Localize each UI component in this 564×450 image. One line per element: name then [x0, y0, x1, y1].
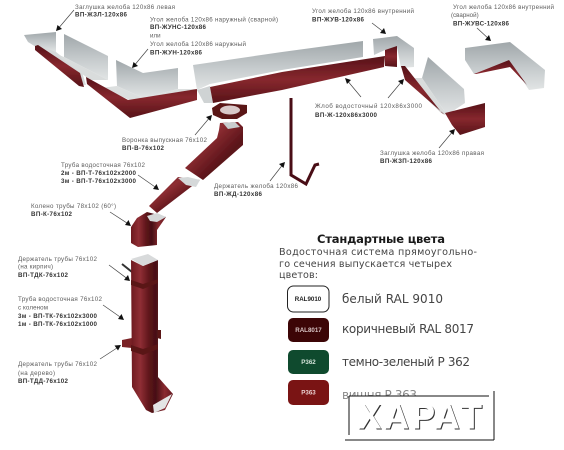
arrow: pipe — [138, 175, 159, 190]
watermark — [345, 391, 494, 440]
label: brick holder: Держатель трубы 76х102 — [18, 256, 98, 263]
arrow: funnel — [195, 115, 212, 135]
label: inner corner — [312, 8, 415, 24]
label: inner corner: ВП-ЖУВ-120х86 — [312, 16, 365, 24]
label: outer corner: Угол желоба 120х86 наружный — [150, 41, 247, 48]
arrow: wood holder — [100, 345, 121, 359]
arrow: right cap — [439, 129, 455, 148]
illustration: outlet funnel and pipes — [131, 103, 247, 247]
label: pipe: Труба водосточная 76х102 — [61, 162, 146, 169]
label: pipe with elbow — [18, 296, 103, 328]
rear tab — [157, 330, 161, 339]
label: elbow — [31, 203, 116, 218]
funnel outlet pipe — [185, 122, 243, 180]
illustration: downpipe with elbow and holders — [122, 254, 173, 413]
straight pipe — [149, 177, 200, 213]
label: pipe with elbow: Труба водосточная 76х102 — [18, 296, 103, 303]
swatch: white — [288, 286, 329, 312]
pipe body — [131, 260, 173, 413]
arrow: gutter right — [388, 79, 404, 98]
swatch: brown: RAL8017 — [295, 327, 322, 334]
pipe elbow — [131, 212, 166, 247]
clamps — [131, 279, 158, 355]
swatch: brown — [288, 318, 329, 342]
label: outer corner — [150, 16, 278, 56]
label: outer corner: ВП-ЖУН-120х86 — [150, 50, 203, 56]
label: welded inner corner: ВП-ЖУВС-120х86 — [453, 20, 510, 28]
long gutter section — [193, 41, 385, 103]
label: pipe: 3м - ВП-Т-76х102х3000 — [61, 178, 137, 185]
watermark: ХАРАТ — [358, 398, 482, 436]
illustration: gutter assembly — [24, 32, 545, 135]
bottom opening — [153, 394, 172, 413]
brick holder spike — [122, 264, 132, 272]
arrow: gutter left — [345, 78, 361, 97]
label: brick holder: ВП-ТДК-76х102 — [18, 272, 69, 279]
arrow: hook holder — [270, 162, 285, 181]
heading: Стандартные цвета — [317, 232, 445, 246]
label: pipe with elbow: с коленом — [18, 304, 48, 312]
colour label: brown: коричневый RAL 8017 — [342, 322, 474, 336]
label: welded inner corner: (сварной) — [451, 12, 479, 19]
label: wood holder — [18, 361, 98, 385]
colour label: green: темно-зеленый Р 362 — [342, 355, 470, 369]
label: pipe: 2м - ВП-Т-76х102х2000 — [61, 170, 137, 177]
funnel ring — [212, 103, 247, 119]
label: pipe with elbow: 1м - ВП-ТК-76х102х1000 — [18, 321, 98, 328]
label: funnel: ВП-В-76х102 — [122, 145, 165, 152]
label: outer corner: Угол желоба 120х86 наружный (сварной) — [150, 16, 278, 24]
swatch: white: RAL9010 — [295, 296, 322, 303]
arrow: pipe with elbow — [103, 305, 124, 320]
intro text — [279, 247, 477, 281]
arrow: outer corner — [132, 49, 148, 68]
label: brick holder — [18, 256, 98, 279]
arrows — [56, 10, 491, 359]
label: brick holder: (на кирпич) — [18, 264, 53, 270]
label: gutter — [315, 103, 423, 119]
label: gutter: Жлоб водосточный 120х86х3000 — [315, 103, 423, 110]
label: gutter: ВП-Ж-120х86х3000 — [315, 112, 378, 119]
label: left cap — [75, 4, 175, 18]
label: welded inner corner: Угол желоба 120х86 внутренний — [453, 4, 555, 11]
label: right cap: Заглушка желоба 120х86 правая — [380, 150, 484, 157]
watermark: ХАРАТ — [359, 398, 483, 438]
outer corner section — [86, 60, 197, 118]
label: funnel — [122, 137, 208, 152]
right gutter section with end cap — [401, 57, 485, 135]
arrow: left cap — [56, 10, 74, 31]
top opening — [131, 254, 158, 266]
panel: standard colours — [279, 232, 477, 405]
arrow: brick holder — [109, 265, 130, 281]
label: elbow: ВП-К-76х102 — [31, 211, 73, 218]
label: pipe — [61, 162, 146, 185]
label: wood holder: ВП-ТДД-76х102 — [18, 378, 69, 385]
label: wood holder: (на дерево) — [18, 370, 55, 377]
label: welded inner corner — [451, 4, 555, 28]
arrow: inner corner — [372, 23, 386, 34]
label: wood holder: Держатель трубы 76х102 — [18, 361, 98, 368]
intro text: го сечения выпускается четырех — [279, 259, 452, 270]
swatch: green: P362 — [301, 359, 316, 366]
label: funnel: Воронка выпускная 76х102 — [122, 137, 208, 144]
swatch: green — [288, 350, 329, 374]
label: right cap: ВП-ЖЗП-120х86 — [380, 158, 433, 165]
label: right cap — [380, 150, 484, 165]
label: hook holder — [214, 183, 299, 198]
label: left cap: ВП-ЖЗЛ-120х86 — [75, 12, 128, 18]
intro text: Водосточная система прямоугольно- — [279, 247, 477, 258]
wood holder — [122, 338, 132, 348]
swatch: cherry — [288, 380, 329, 405]
arrow: elbow — [110, 212, 131, 226]
colour label: cherry: вишня Р 363 — [342, 388, 417, 402]
label: pipe with elbow: 3м - ВП-ТК-76х102х3000 — [18, 313, 98, 320]
illustration: gutter holder hook — [291, 98, 319, 184]
separate inner corner piece — [465, 42, 545, 90]
label: outer corner: или — [150, 32, 161, 40]
swatch: cherry: P363 — [301, 390, 316, 396]
colour label: white: белый RAL 9010 — [342, 292, 443, 306]
inner corner section — [373, 36, 414, 68]
label: outer corner: ВП-ЖУНС-120х86 — [150, 24, 207, 31]
left gutter section with end cap — [24, 32, 108, 87]
intro text: цветов: — [279, 270, 318, 281]
label: hook holder: ВП-ЖД-120х86 — [214, 191, 263, 198]
label: elbow: Колено трубы 78х102 (60°) — [31, 203, 116, 210]
label: hook holder: Держатель желоба 120х86 — [214, 183, 299, 190]
label: left cap: Заглушка желоба 120х86 левая — [75, 4, 175, 11]
label: inner corner: Угол желоба 120х86 внутренний — [312, 8, 415, 15]
arrow: separate inner corner — [477, 28, 491, 41]
